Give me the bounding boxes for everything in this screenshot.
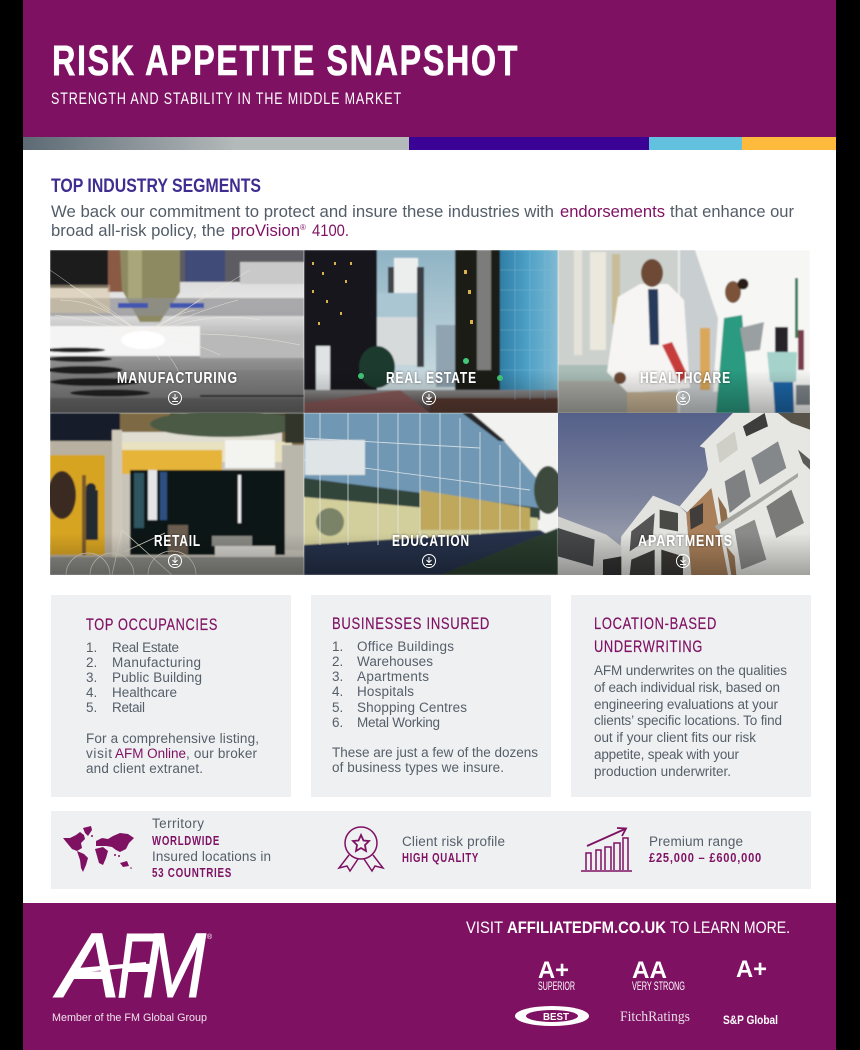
note: business types: of business types we insure.	[332, 760, 504, 775]
call to action: AFFILIATEDFM.CO.UK	[507, 918, 667, 937]
note: business types: These are just a few of the dozens	[332, 745, 538, 760]
paragraph: underwriting: of each individual risk, based on	[594, 680, 780, 695]
note: comprehensive listing: , our broker	[186, 746, 258, 761]
paragraph: underwriting: production underwriter.	[594, 764, 731, 779]
list: occupancies: Retail	[112, 700, 145, 715]
label: retail: RETAIL	[154, 533, 201, 550]
text: premium range: Premium range	[649, 834, 743, 849]
photo: manufacturing	[45, 250, 304, 413]
intro paragraph: that enhance our	[670, 203, 794, 221]
list: occupancies: 2.	[86, 655, 97, 670]
intro paragraph: We back our commitment to protect and insure these industries with	[51, 203, 554, 221]
heading: location-based underwriting: LOCATION-BASED	[594, 614, 717, 633]
text: client risk profile: HIGH QUALITY	[402, 851, 479, 865]
paragraph: underwriting: engineering evaluations at your	[594, 697, 778, 712]
text: territory: 53 COUNTRIES	[152, 866, 232, 880]
intro paragraph: broad all-risk policy, the	[51, 222, 225, 240]
note: comprehensive listing: For a comprehensive listing,	[86, 731, 259, 746]
photo: healthcare	[558, 250, 810, 413]
icon: rising bar chart	[581, 828, 632, 871]
list: businesses: Shopping Centres	[357, 700, 467, 715]
icon: world map	[63, 826, 134, 872]
rating: S&amp;P: S&P Global	[723, 1013, 778, 1027]
label: healthcare: HEALTHCARE	[640, 370, 731, 387]
text: client risk profile: Client risk profile	[402, 834, 505, 849]
list: businesses	[332, 639, 467, 730]
colour stripe	[23, 137, 836, 150]
paragraph: underwriting: appetite, speak with your	[594, 747, 740, 762]
list: businesses: 1.	[332, 639, 343, 654]
rating: AM Best: BEST	[543, 1012, 569, 1023]
subtitle: STRENGTH AND STABILITY IN THE MIDDLE MARKET	[51, 89, 402, 108]
intro paragraph: ®	[300, 223, 306, 232]
photo: real estate	[304, 250, 558, 413]
logo: AFM: A	[53, 915, 120, 1017]
call to action: VISIT	[466, 918, 503, 937]
logo: AFM	[52, 915, 213, 1017]
text: client risk profile	[402, 834, 505, 865]
list: occupancies	[86, 640, 202, 715]
rating: S&amp;P	[723, 956, 778, 1027]
photo label shading	[50, 370, 810, 575]
paragraph: underwriting	[594, 663, 787, 779]
call to action	[466, 918, 790, 937]
list: businesses: Office Buildings	[357, 639, 454, 654]
note: comprehensive listing	[86, 731, 259, 776]
note: business types	[332, 745, 538, 775]
list: businesses: 6.	[332, 715, 343, 730]
panel: top occupancies	[51, 595, 291, 797]
paragraph: underwriting: clients’ specific locations. To find	[594, 713, 782, 728]
paragraph: underwriting: AFM underwrites on the qualities	[594, 663, 787, 678]
photo labels	[117, 370, 733, 550]
logo: AFM: ®	[207, 933, 213, 941]
text: territory	[152, 816, 271, 880]
list: occupancies: Manufacturing	[112, 655, 201, 670]
footer band	[23, 903, 836, 1050]
intro paragraph: proVision	[231, 222, 300, 240]
heading: location-based underwriting	[594, 614, 717, 656]
rating: Fitch	[620, 957, 690, 1025]
list: businesses: Metal Working	[357, 715, 440, 730]
icon: rosette	[339, 827, 383, 871]
list: occupancies: 5.	[86, 700, 97, 715]
label: real estate: REAL ESTATE	[386, 370, 477, 387]
text: territory: Territory	[152, 816, 204, 831]
logo: AFM: M	[142, 915, 206, 1017]
label: manufacturing: MANUFACTURING	[117, 370, 238, 387]
list: businesses: 4.	[332, 684, 343, 699]
list: businesses: Warehouses	[357, 654, 433, 669]
rating: AM Best: SUPERIOR	[538, 979, 575, 993]
label: education: EDUCATION	[392, 533, 470, 550]
intro paragraph	[51, 203, 794, 240]
label: apartments: APARTMENTS	[638, 533, 733, 550]
list: businesses: Apartments	[357, 669, 429, 684]
text: premium range: £25,000 – £600,000	[649, 851, 762, 865]
rating: Fitch: VERY STRONG	[632, 979, 685, 993]
paragraph: underwriting: out if your client fits our risk	[594, 730, 756, 745]
panel: key facts strip	[51, 811, 811, 889]
list: occupancies: 4.	[86, 685, 97, 700]
title: RISK APPETITE SNAPSHOT	[52, 37, 519, 85]
intro paragraph: endorsements	[560, 203, 665, 221]
list: businesses: Hospitals	[357, 684, 414, 699]
list: occupancies: Public Building	[112, 670, 202, 685]
list: businesses: 2.	[332, 654, 343, 669]
panel: location-based underwriting	[571, 595, 811, 797]
download icons	[168, 392, 690, 568]
section heading: TOP INDUSTRY SEGMENTS	[51, 176, 261, 197]
note: comprehensive listing: visit	[86, 746, 112, 761]
photo: apartments	[558, 413, 810, 575]
note: comprehensive listing: AFM Online	[115, 746, 186, 761]
heading: location-based underwriting: UNDERWRITING	[594, 637, 703, 656]
rating: Fitch: AA	[632, 957, 667, 984]
list: occupancies: 3.	[86, 670, 97, 685]
photo: retail	[50, 413, 304, 575]
text: premium range	[649, 834, 762, 865]
heading: top occupancies: TOP OCCUPANCIES	[86, 615, 218, 634]
note: comprehensive listing: and client extranet.	[86, 761, 203, 776]
call to action: TO LEARN MORE.	[670, 918, 790, 937]
heading: businesses insured: BUSINESSES INSURED	[332, 614, 490, 633]
intro paragraph: 4100.	[312, 222, 349, 240]
header band	[23, 0, 836, 137]
list: occupancies: Healthcare	[112, 685, 177, 700]
text: member line: Member of the FM Global Group	[52, 1012, 207, 1024]
list: businesses: 3.	[332, 669, 343, 684]
panel: businesses insured	[311, 595, 551, 797]
list: occupancies: Real Estate	[112, 640, 179, 655]
rating: Fitch: FitchRatings	[620, 1009, 690, 1025]
text: territory: WORLDWIDE	[152, 834, 220, 848]
rating: AM Best: A+	[538, 957, 569, 984]
list: occupancies: 1.	[86, 640, 97, 655]
photo: education	[304, 413, 562, 575]
rating: AM Best	[515, 957, 589, 1026]
list: businesses: 5.	[332, 700, 343, 715]
rating: S&amp;P: A+	[736, 956, 767, 983]
logo: AFM: F	[117, 915, 158, 1017]
text: territory: Insured locations in	[152, 849, 271, 864]
